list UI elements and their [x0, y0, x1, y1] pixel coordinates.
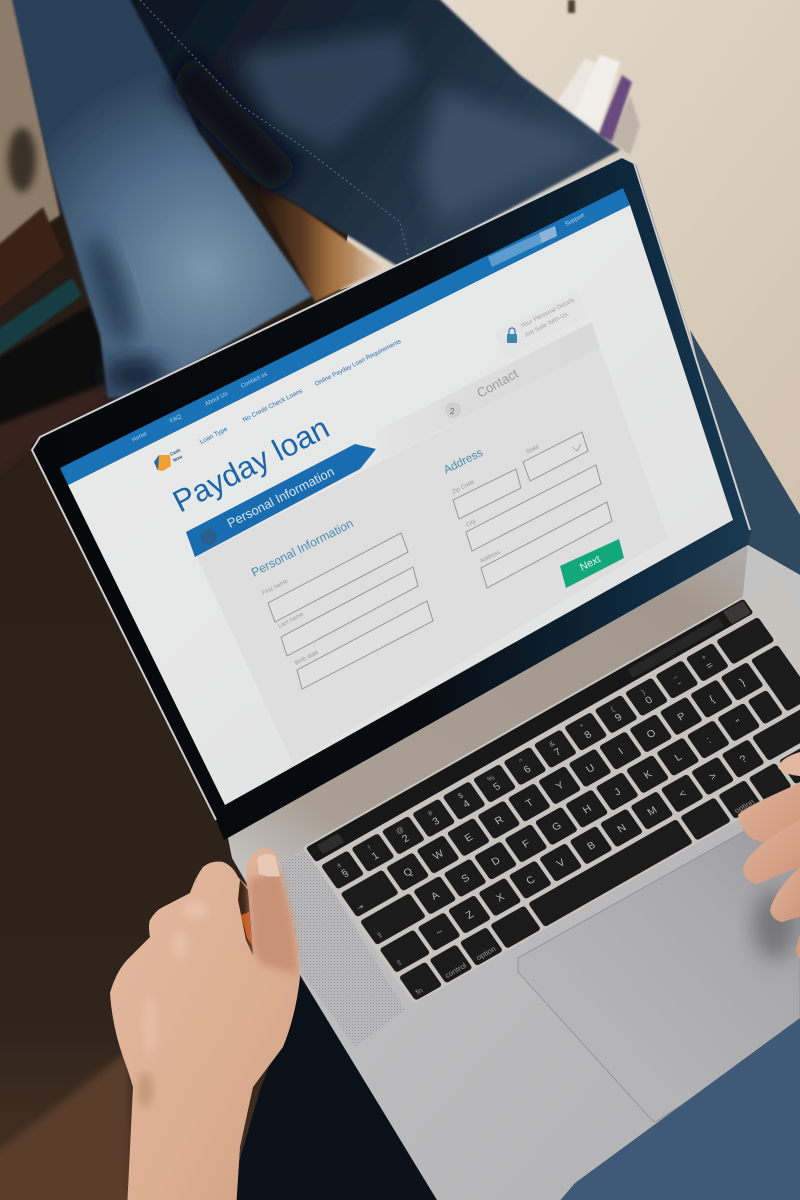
secondary menu: Online Payday Loan Requirements — [314, 338, 402, 388]
section heading: address: Address — [442, 447, 485, 477]
books on the wall side — [552, 0, 640, 155]
thumb nail — [257, 854, 280, 877]
right hand fingers — [738, 752, 800, 960]
personal fields: Last name — [277, 611, 305, 630]
personal fields: First name — [261, 578, 290, 597]
QWERTY row: ⇥ — [355, 902, 366, 913]
number row: 8 — [583, 729, 594, 741]
bottom letter row: < — [677, 788, 689, 800]
speaker grille — [280, 850, 405, 1047]
security note — [495, 290, 586, 358]
bottom letter row: N — [616, 823, 629, 835]
modifier row: fn — [414, 986, 424, 996]
knee shadow — [105, 357, 165, 393]
next button — [560, 539, 624, 588]
address fields: Address — [479, 549, 502, 565]
fabric highlights — [240, 30, 415, 150]
number row: 9 — [613, 712, 625, 724]
thumb shading — [248, 870, 298, 975]
address fields: State — [525, 444, 541, 456]
QWERTY row: R — [493, 815, 506, 827]
personal fields — [261, 533, 433, 689]
trackpad finger shadow — [753, 890, 797, 960]
secondary menu — [199, 338, 402, 446]
number row: ( — [609, 705, 617, 713]
number row — [321, 617, 775, 890]
QWERTY row: P — [676, 711, 688, 723]
jeans: thigh — [125, 0, 620, 268]
number row: $ — [456, 791, 466, 800]
logo: Cash — [169, 447, 181, 457]
home row: ⇪ — [374, 930, 385, 940]
QWERTY row: } — [738, 677, 748, 688]
keyboard — [303, 577, 800, 1004]
number row: + — [699, 652, 709, 662]
deck top right corner — [742, 545, 800, 700]
jeans: lower leg — [10, 0, 312, 398]
wood leg behind knee — [250, 178, 385, 302]
laptop base — [228, 545, 800, 1200]
nav links: Support — [564, 213, 586, 228]
deck above the keyboard — [228, 545, 748, 870]
number row: ! — [366, 843, 373, 852]
ribbon: Personal Information: Personal Information — [225, 464, 337, 531]
number row: ) — [639, 687, 647, 696]
wrist crease — [137, 1072, 153, 1108]
touch bar — [306, 599, 754, 862]
home row: " — [735, 718, 745, 729]
number row: 7 — [552, 747, 564, 759]
home row: K — [642, 769, 655, 781]
icon: lock — [507, 328, 517, 343]
QWERTY row: E — [463, 832, 475, 844]
home row: H — [581, 804, 594, 816]
lid rim — [32, 157, 750, 820]
home row: A — [429, 890, 442, 903]
QWERTY row: { — [708, 694, 718, 705]
QWERTY row: U — [584, 763, 597, 775]
QWERTY row: T — [524, 797, 536, 810]
QWERTY row: Q — [402, 866, 415, 879]
QWERTY row: Y — [554, 780, 567, 793]
QWERTY row: I — [617, 747, 626, 757]
number row: = — [704, 660, 716, 672]
QWERTY row: O — [645, 728, 658, 741]
logo: Now — [172, 454, 183, 463]
number row: 6 — [522, 764, 534, 776]
jeans: under laptop — [225, 960, 460, 1200]
next button: Next — [578, 553, 603, 574]
number row: * — [578, 722, 586, 731]
home row: S — [460, 873, 472, 885]
number row: § — [340, 868, 351, 880]
number row: @ — [394, 825, 406, 836]
section heading: personal information: Personal Information — [249, 516, 356, 580]
home row — [360, 690, 783, 945]
QWERTY row — [340, 645, 800, 945]
bottom letter row: M — [646, 805, 659, 818]
home row: L — [673, 752, 685, 764]
form panel — [197, 348, 668, 764]
jeans: right side knee behind laptop — [690, 330, 800, 590]
finger gap with orange object — [238, 880, 253, 955]
seam stitching — [140, 0, 408, 255]
jeans: lower right — [552, 1018, 800, 1200]
nav links — [131, 213, 586, 444]
bottom letter row: ? — [738, 754, 750, 766]
number row: ^ — [517, 756, 526, 766]
screen — [60, 188, 733, 805]
bottom letter row: ⇧ — [394, 958, 405, 968]
bottom letter row: C — [525, 874, 538, 887]
home row: D — [490, 855, 503, 868]
ribbon: Personal Information — [186, 444, 376, 557]
secondary menu: Loan Type — [199, 426, 229, 446]
step 2: contact: Contact — [474, 366, 521, 401]
modifier row — [399, 728, 800, 1001]
left hand — [110, 848, 300, 1200]
bottom letter row: V — [555, 857, 568, 870]
laptop lid — [31, 157, 751, 840]
nav links: FAQ — [169, 414, 183, 425]
step 2: contact: 2 — [450, 407, 455, 416]
security note: Are Safe With Us. — [524, 310, 571, 339]
number row: ± — [335, 860, 343, 870]
QWERTY row: W — [431, 849, 446, 862]
bottom letter row: X — [494, 892, 507, 904]
personal fields: Birth date — [294, 649, 320, 667]
bottom letter row: ~ — [434, 927, 446, 939]
logo — [154, 447, 183, 471]
number row: % — [485, 773, 497, 784]
number row: - — [675, 678, 684, 689]
address fields: City — [465, 519, 477, 529]
nav links: About Us — [204, 391, 229, 408]
modifier row: control — [443, 961, 468, 980]
bottom letter row — [379, 700, 800, 973]
heading: Payday loan: Payday loan — [167, 410, 335, 519]
search box — [488, 226, 557, 267]
step 2: contact — [445, 366, 521, 418]
knuckle highlights — [183, 901, 207, 919]
home row: G — [550, 821, 564, 834]
home row: F — [521, 838, 533, 850]
home row: J — [612, 787, 623, 798]
nav links: Home — [131, 431, 149, 444]
number row: 0 — [644, 695, 655, 707]
secondary menu: No Credit Check Loans — [242, 388, 304, 424]
number row: 1 — [370, 850, 382, 862]
number row: 3 — [431, 816, 442, 828]
number row: 4 — [461, 799, 473, 810]
bottom letter row: Z — [464, 909, 476, 922]
number row: 2 — [400, 833, 412, 845]
address fields — [451, 432, 612, 588]
bottom letter row: B — [586, 840, 598, 852]
number row: & — [547, 739, 557, 749]
bottom letter row: > — [708, 771, 719, 783]
address fields: Zip Code — [451, 479, 476, 496]
number row: # — [426, 808, 435, 818]
modifier row: option — [733, 797, 756, 815]
contact step band — [375, 322, 600, 460]
nav links: Contact us — [240, 371, 268, 390]
keyboard well — [303, 577, 800, 1004]
modifier row: option — [474, 944, 498, 962]
top navigation bar — [60, 188, 630, 485]
home row: : — [705, 735, 713, 746]
number row: _ — [668, 670, 678, 680]
number row: 5 — [492, 781, 503, 793]
security note: Your Personal Details — [520, 297, 576, 330]
trackpad — [518, 800, 800, 1122]
